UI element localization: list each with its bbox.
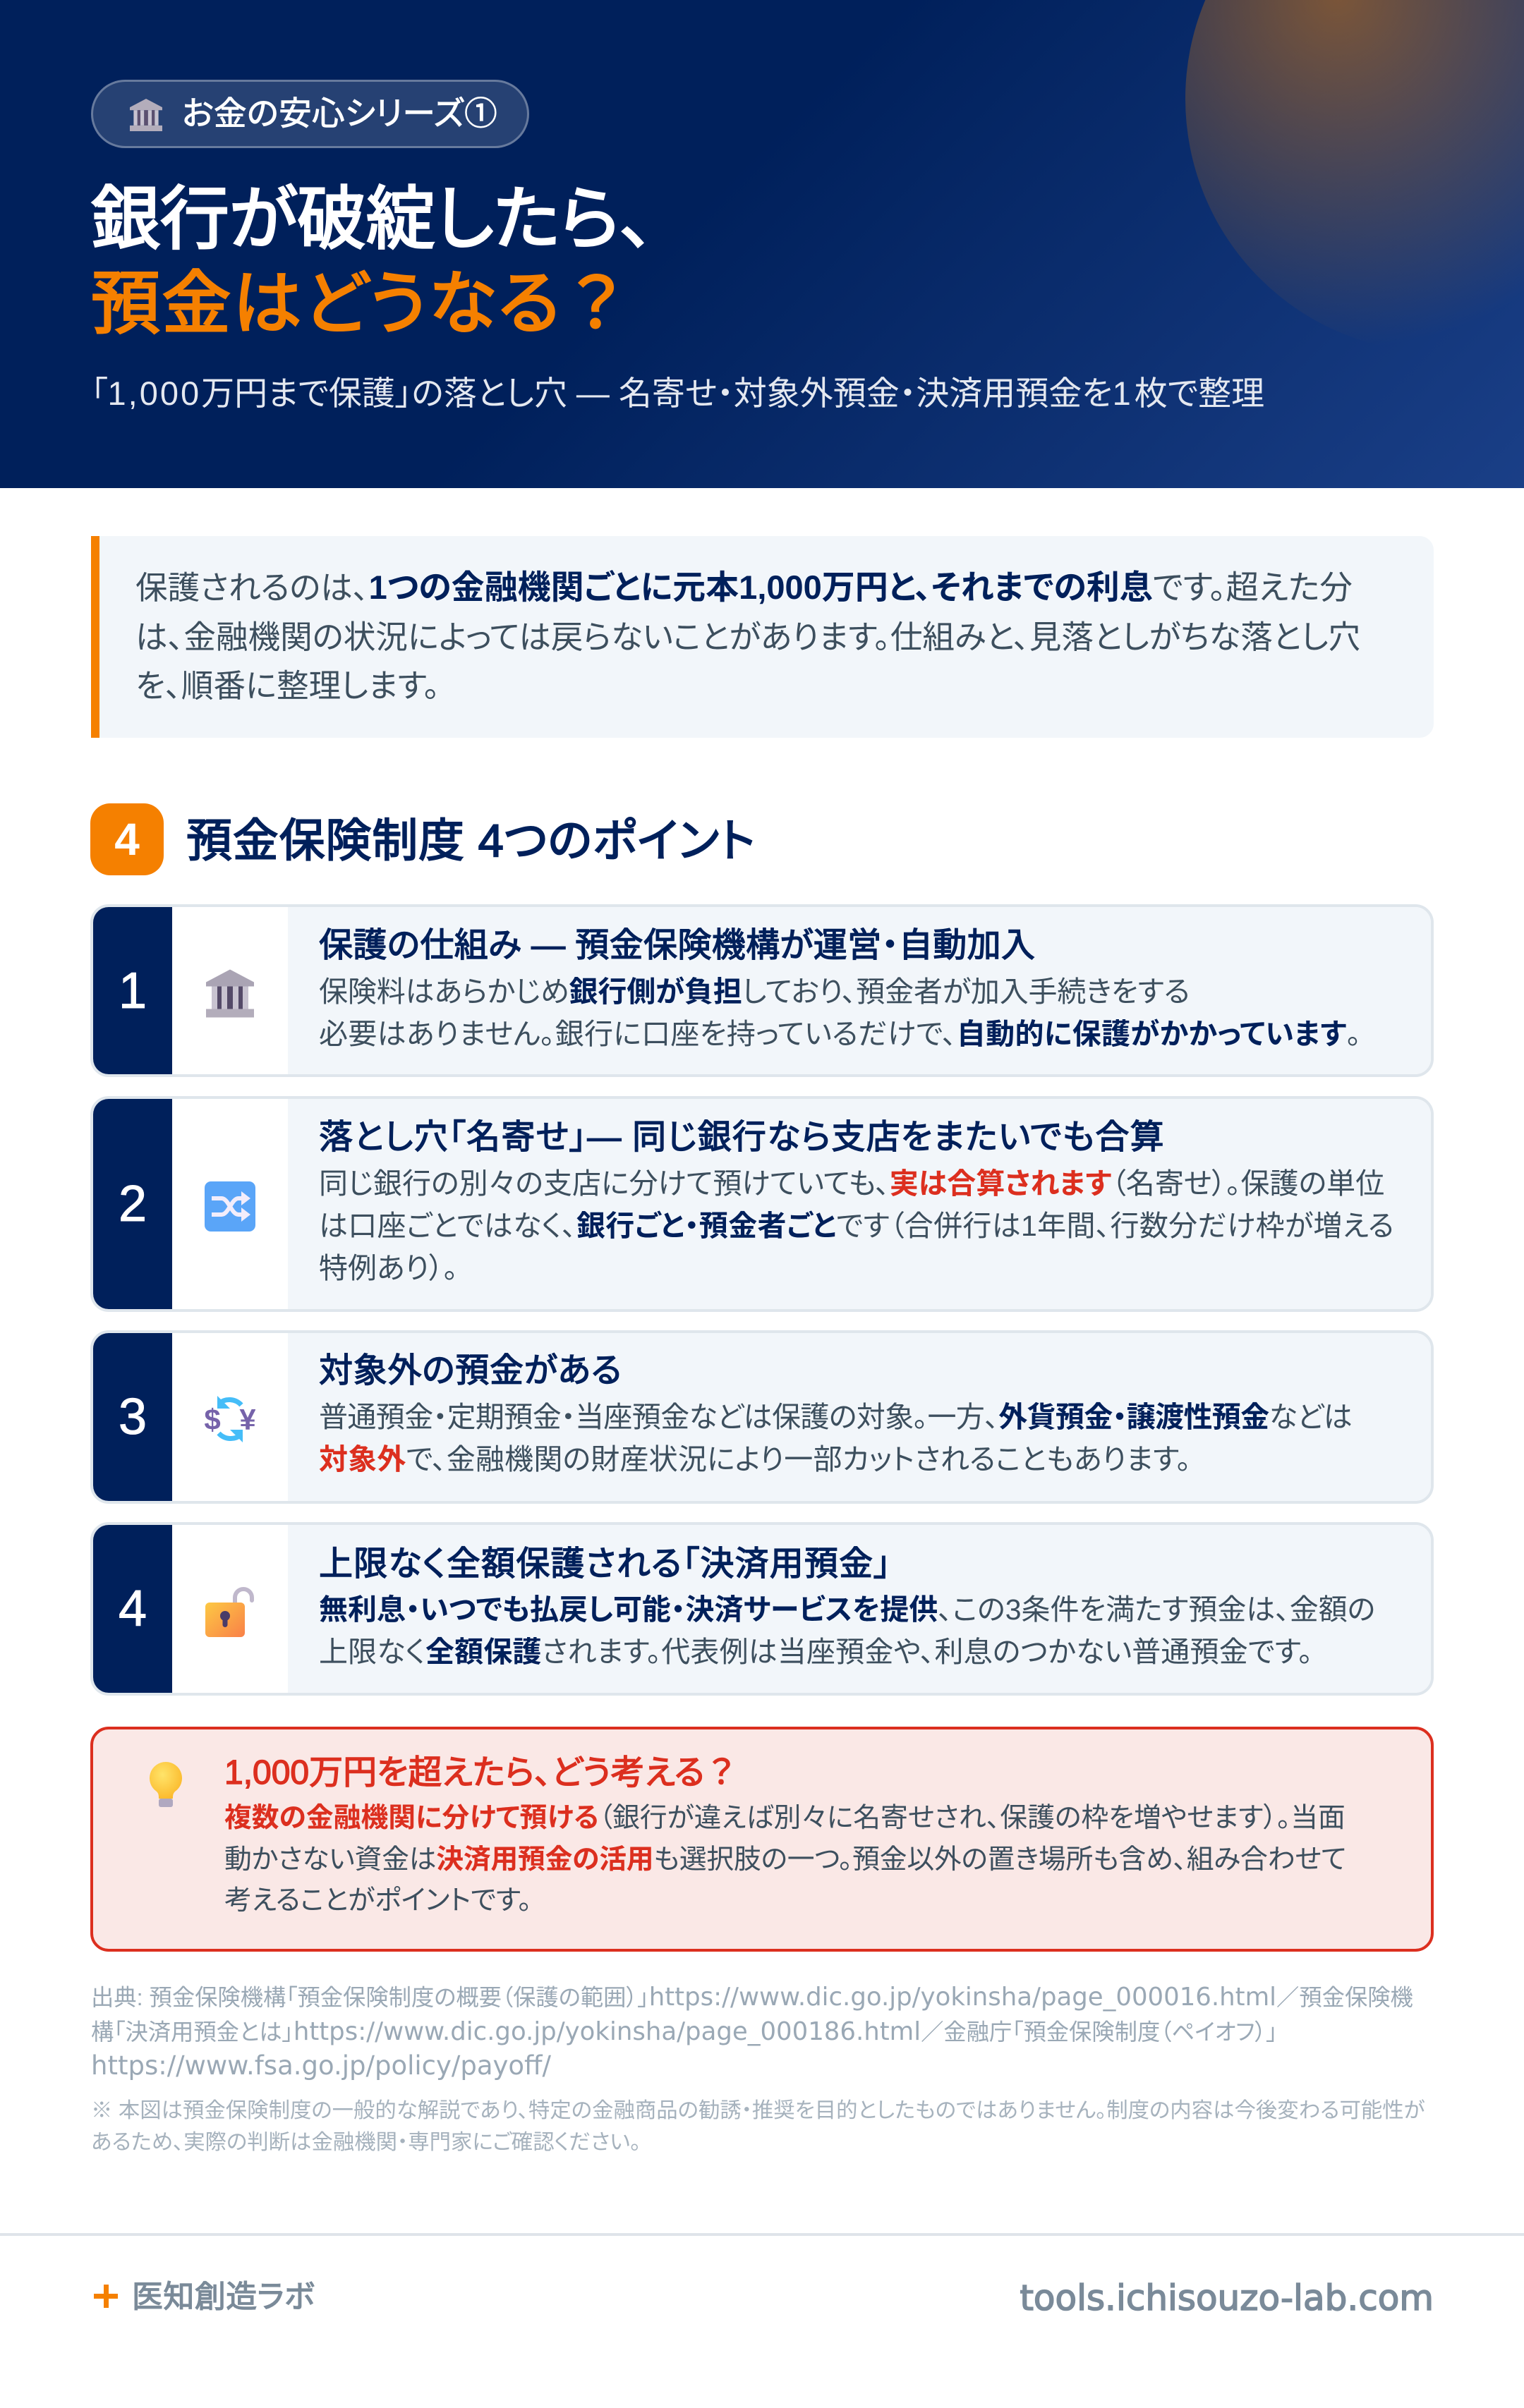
title: 預金はどうなる？ <box>91 264 633 342</box>
title <box>90 180 654 342</box>
card body: 保険料はあらかじめ銀行側が負担しており、預金者が加入手続きをする <box>319 975 1190 1008</box>
callout body: 複数の金融機関に分けて預ける（銀行が違えば別々に名寄せされ、保護の枠を増やせます）。当面 <box>224 1803 1345 1833</box>
icon: light bulb <box>150 1762 182 1807</box>
text panel <box>288 1333 1431 1501</box>
disclaimer: あるため、実際の判断は金融機関・専門家にご確認ください。 <box>91 2130 641 2154</box>
number 1 <box>93 907 172 1074</box>
section badge <box>90 803 164 875</box>
intro text: を、順番に整理します。 <box>135 668 440 704</box>
icon: bank <box>206 969 254 1017</box>
intro text <box>135 568 1360 704</box>
number 4: 4 <box>119 1581 147 1637</box>
card body <box>319 1401 1352 1476</box>
callout body: 考えることがポイントです。 <box>224 1885 532 1916</box>
intro panel <box>91 536 1434 738</box>
callout <box>90 1727 1434 1952</box>
card body: 特例あり）。 <box>319 1252 458 1284</box>
icon: currency exchange: ¥ <box>239 1403 255 1436</box>
icon: currency exchange: $ <box>205 1403 221 1436</box>
header band <box>0 0 1524 488</box>
text panel <box>288 1525 1431 1693</box>
card body: 無利息・いつでも払戻し可能・決済サービスを提供、この3条件を満たす預金は、金額の <box>319 1593 1375 1626</box>
number 2 <box>93 1099 172 1309</box>
number 1: 1 <box>119 962 147 1018</box>
title: 銀行が破綻したら、 <box>91 180 654 257</box>
number 2: 2 <box>119 1176 147 1232</box>
card title: 対象外の預金がある <box>319 1352 622 1390</box>
icon: currency exchange <box>205 1396 255 1442</box>
callout body: 動かさない資金は決済用預金の活用も選択肢の一つ。預金以外の置き場所も含め、組み合わせて <box>224 1844 1346 1875</box>
intro text: は、金融機関の状況によっては戻らないことがあります。仕組みと、見落としがちな落とし穴 <box>135 619 1360 655</box>
pill label: お金の安心シリーズ① <box>182 95 497 132</box>
number 3: 3 <box>119 1389 147 1445</box>
card body: 対象外で、金融機関の財産状況により一部カットされることもあります。 <box>319 1443 1191 1476</box>
card body: 必要はありません。銀行に口座を持っているだけで、自動的に保護がかかっています。 <box>319 1018 1361 1050</box>
card body: 上限なく全額保護されます。代表例は当座預金や、利息のつかない普通預金です。 <box>319 1636 1313 1668</box>
card body <box>319 1167 1394 1284</box>
number 4 <box>93 1525 172 1693</box>
disclaimer: ※ 本図は預金保険制度の一般的な解説であり、特定の金融商品の勧誘・推奨を目的としたものではありません。制度の内容は今後変わる可能性が <box>91 2098 1425 2122</box>
source text: 出典: 預金保険機構「預金保険制度の概要（保護の範囲）」https://www.dic.go.jp/yokinsha/page_000016.html／預金保険機 <box>91 1983 1413 2012</box>
icon: open lock <box>205 1587 254 1637</box>
text panel <box>288 907 1431 1074</box>
card body: は口座ごとではなく、銀行ごと・預金者ごとです（合併行は1年間、行数分だけ枠が増える <box>319 1210 1394 1242</box>
footer url: tools.ichisouzo-lab.com <box>1020 2278 1434 2318</box>
brand name: 医知創造ラボ <box>132 2280 315 2314</box>
card title: 保護の仕組み ― 預金保険機構が運営・自動加入 <box>319 927 1035 964</box>
card title: 上限なく全額保護される「決済用預金」 <box>319 1545 892 1583</box>
card body <box>319 975 1361 1050</box>
source text: 構「決済用預金とは」https://www.dic.go.jp/yokinsha/page_000186.html／金融庁「預金保険制度（ペイオフ）」 <box>91 2017 1278 2045</box>
source text <box>91 1983 1413 2081</box>
disclaimer <box>91 2098 1425 2154</box>
number 3 <box>93 1333 172 1501</box>
subtitle: 「1,000万円まで保護」の落とし穴 ― 名寄せ・対象外預金・決済用預金を1枚で整理 <box>91 375 1264 412</box>
series pill <box>91 80 529 148</box>
text panel <box>288 1099 1431 1309</box>
card 1 <box>90 904 1434 1077</box>
card title: 落とし穴「名寄せ」― 同じ銀行なら支店をまたいでも合算 <box>319 1119 1165 1156</box>
card body <box>319 1593 1375 1668</box>
card 2 <box>90 1096 1434 1312</box>
section badge: 4 <box>114 814 140 865</box>
callout body <box>224 1803 1346 1916</box>
source text: https://www.fsa.go.jp/policy/payoff/ <box>91 2050 551 2081</box>
icon: bank <box>130 99 162 131</box>
decorative orange circle <box>1185 0 1524 353</box>
callout title: 1,000万円を超えたら、どう考える？ <box>224 1754 739 1792</box>
footer divider <box>0 2233 1524 2236</box>
card body: 普通預金・定期預金・当座預金などは保護の対象。一方、外貨預金・譲渡性預金などは <box>319 1401 1352 1433</box>
card 4 <box>90 1522 1434 1696</box>
footer brand <box>94 2280 315 2314</box>
icon: plus <box>94 2285 118 2308</box>
card body: 同じ銀行の別々の支店に分けて預けていても、実は合算されます（名寄せ）。保護の単位 <box>319 1167 1384 1200</box>
icon: shuffle <box>205 1181 255 1232</box>
card 3 <box>90 1330 1434 1504</box>
intro text: 保護されるのは、1つの金融機関ごとに元本1,000万円と、それまでの利息です。超えた分 <box>135 568 1353 606</box>
section heading: 預金保険制度 4つのポイント <box>186 815 756 866</box>
